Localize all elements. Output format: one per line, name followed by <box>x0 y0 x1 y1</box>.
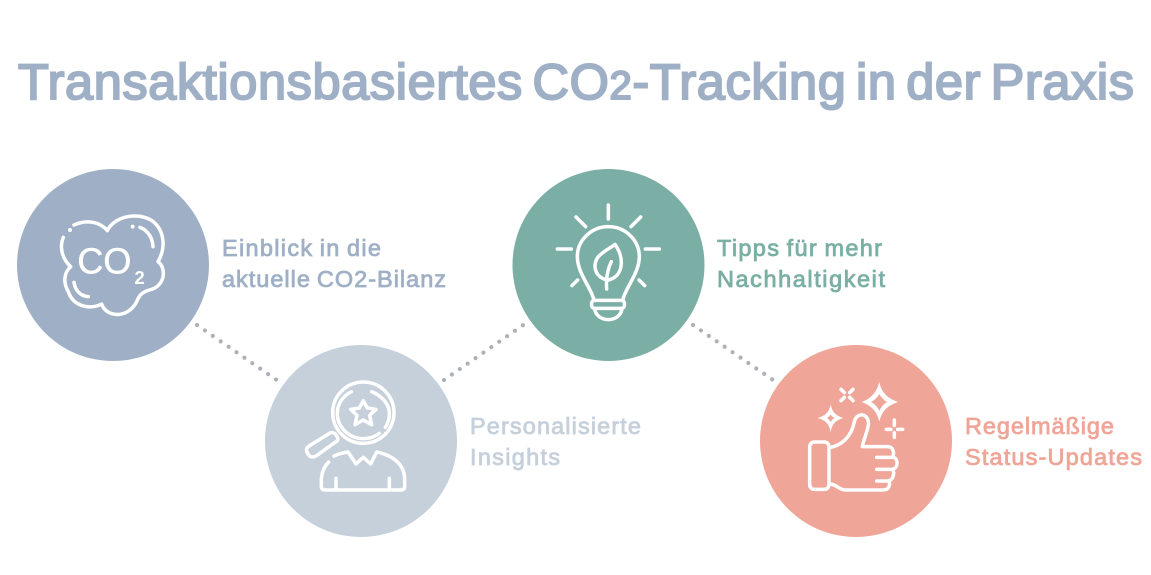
icon: thumbs up with sparkles <box>810 382 903 490</box>
text: step 1 label <box>222 235 446 292</box>
text: step 3 label: Tipps für mehr <box>717 235 882 261</box>
text: step 2 label <box>470 413 641 470</box>
connector: step 3 to step 4 <box>693 325 776 382</box>
icon: CO2 cloud <box>61 216 163 314</box>
icon: light bulb with leaf <box>557 205 659 320</box>
panel: step 4 circle <box>760 345 952 537</box>
icon detail: large sparkle <box>862 382 898 422</box>
text: step 2 label: Insights <box>470 444 560 470</box>
connector: step 1 to step 2 <box>197 325 281 383</box>
icon: magnifier with star and person <box>306 382 405 490</box>
panel: step 2 circle <box>265 345 457 537</box>
panel: step 1 circle <box>17 169 209 361</box>
text: step 1 label: aktuelle CO2-Bilanz <box>222 266 446 292</box>
title: Transaktionsbasiertes CO2-Tracking in der Praxis <box>18 53 1134 110</box>
text: step 3 label: Nachhaltigkeit <box>717 266 885 292</box>
icon detail: small sparkle <box>818 404 843 433</box>
text: step 1 label: Einblick in die <box>222 235 381 261</box>
icon: CO2 cloud: 2 <box>134 267 145 288</box>
panel: step 3 circle <box>512 169 704 361</box>
text: step 4 label: Status-Updates <box>965 444 1142 470</box>
text: step 4 label: Regelmäßige <box>965 413 1114 439</box>
icon: CO2 cloud: CO <box>77 241 131 282</box>
text: step 4 label <box>965 413 1142 470</box>
text: step 3 label <box>717 235 885 292</box>
text: step 2 label: Personalisierte <box>470 413 641 439</box>
connector: step 2 to step 3 <box>444 321 529 380</box>
